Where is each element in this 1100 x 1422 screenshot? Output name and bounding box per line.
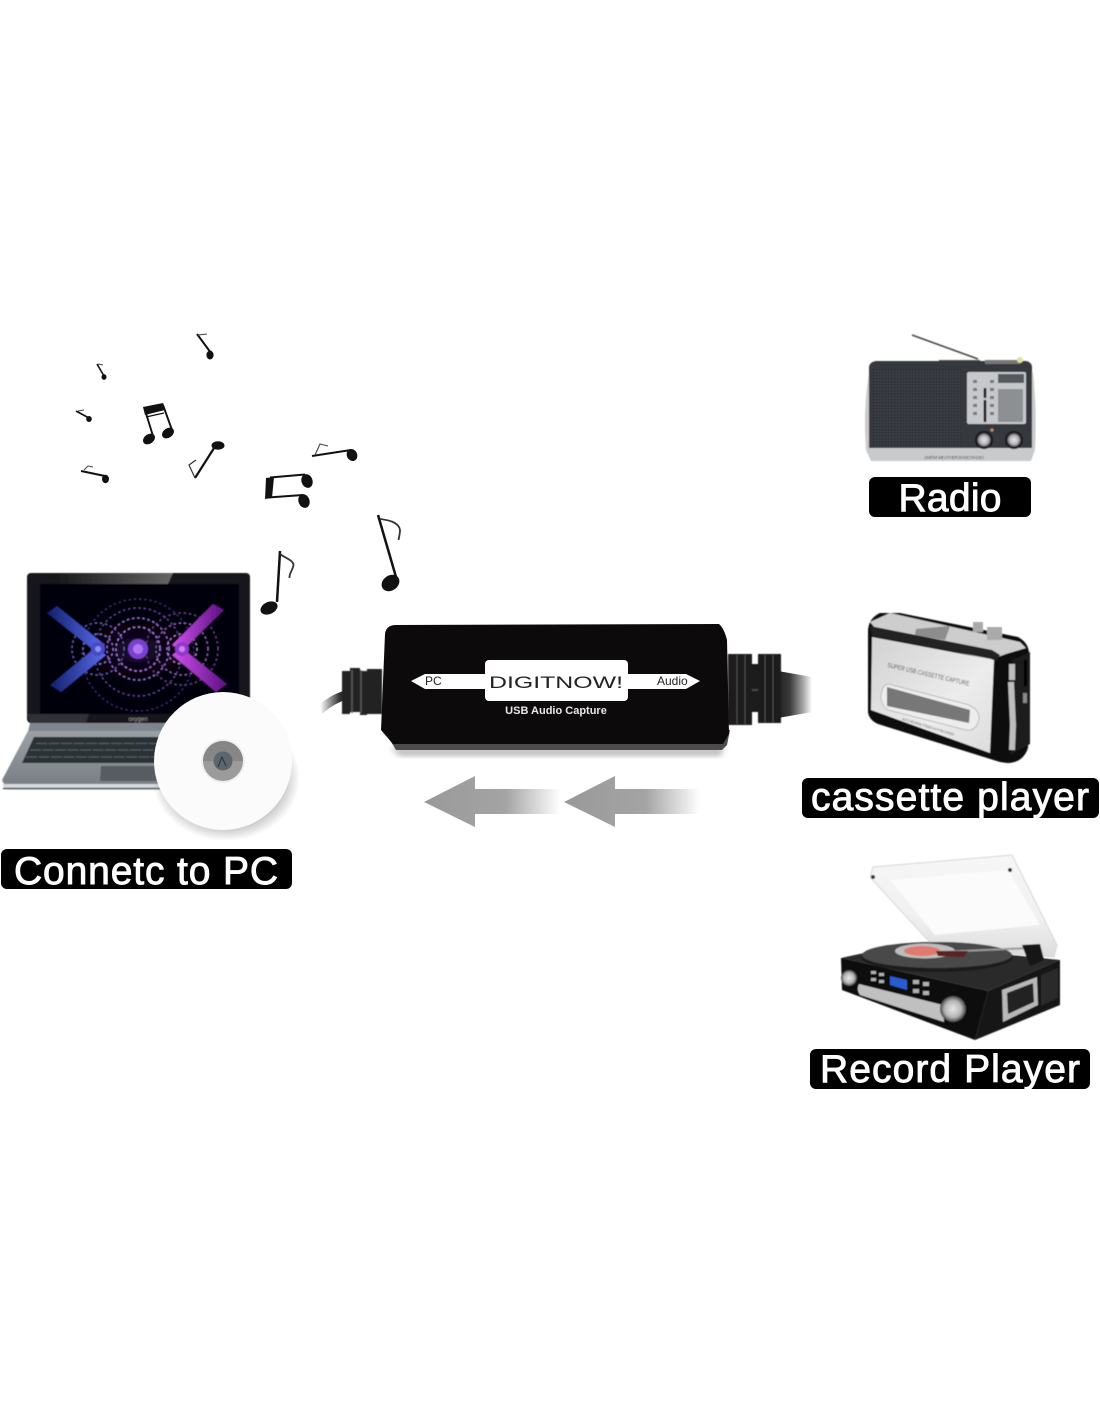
device base edge	[382, 728, 730, 750]
direction arrows	[424, 776, 700, 827]
music note: large right	[378, 515, 403, 595]
device caption: USB Audio Capture	[505, 705, 607, 717]
arrow: left	[424, 776, 560, 827]
radio antenna	[912, 335, 978, 359]
turntable platter	[861, 942, 1013, 972]
label: Radio	[869, 477, 1031, 520]
music note: horizontal beamed pair	[265, 473, 315, 509]
cassette face	[871, 637, 994, 753]
left strain relief	[342, 668, 382, 715]
turntable large knob	[940, 996, 966, 1022]
radio tuning panel	[967, 372, 1026, 424]
device shadow	[390, 748, 725, 756]
laptop lid	[27, 573, 250, 723]
cassette small print: AUTO REVERSE STEREO HI-FI RECORDER	[902, 717, 955, 737]
USB audio capture device	[320, 624, 812, 756]
cassette top chrome	[870, 613, 1026, 660]
turntable tonearm	[936, 944, 1044, 966]
radio speaker grille	[873, 369, 961, 448]
label: cassette player: cassette player	[811, 776, 1089, 819]
music note: top	[197, 334, 214, 360]
label: Record Player: Record Player	[820, 1048, 1080, 1091]
turntable front face	[841, 958, 988, 1040]
laptop screen art	[47, 599, 227, 711]
laptop	[2, 573, 250, 790]
laptop brand text: oxygen	[128, 717, 148, 723]
radio	[865, 335, 1036, 461]
cassette window	[881, 684, 979, 730]
brand name: DIGITNOW!	[489, 673, 623, 692]
Audio label: Audio	[657, 674, 688, 688]
cassette body	[868, 613, 1029, 763]
laptop hinge	[28, 723, 250, 732]
cassette buttons	[915, 622, 1002, 640]
turntable buttons	[871, 971, 929, 995]
radio casing	[865, 357, 1036, 461]
disc face	[154, 692, 292, 830]
left cable	[320, 690, 348, 714]
label: Radio: Radio	[898, 477, 1002, 520]
cassette top dark trim	[870, 626, 1000, 660]
PC label: PC	[425, 674, 442, 688]
turntable body top	[841, 944, 1060, 991]
music notes cluster	[76, 334, 403, 617]
record player	[841, 855, 1060, 1040]
music note: right flat	[312, 444, 359, 463]
turntable silver band	[858, 984, 944, 1022]
turntable small knob	[841, 970, 857, 986]
cassette caption: SUPER USB CASSETTE CAPTURE	[887, 662, 970, 688]
radio knobs	[975, 428, 1023, 449]
right strain relief	[728, 654, 781, 725]
music note: large lower	[258, 551, 294, 617]
music note: small left	[76, 410, 92, 422]
music note: beamed pair	[141, 403, 176, 447]
turntable blue display	[890, 976, 907, 990]
radio model text: AM/FM WEATHER BAND RADIO	[924, 455, 984, 460]
disc hub	[201, 739, 245, 783]
music note: centre tilted	[189, 441, 224, 478]
arrow: right	[564, 776, 700, 827]
device label arrow	[411, 660, 700, 701]
turntable cassette door	[1002, 968, 1058, 1022]
turntable lid	[870, 855, 1057, 957]
label: Connetc to PC: Connetc to PC	[14, 850, 278, 893]
laptop keyboard deck	[2, 731, 170, 790]
right cable	[778, 671, 812, 718]
cassette player	[868, 613, 1030, 763]
brand plate	[485, 660, 628, 701]
device body	[381, 624, 729, 744]
cassette side	[1010, 652, 1030, 755]
music note: small upper left	[97, 364, 106, 380]
disc shadow	[152, 715, 300, 841]
CD disc	[152, 692, 300, 841]
turntable side face	[975, 960, 1060, 1040]
music note: lower left	[81, 466, 109, 483]
